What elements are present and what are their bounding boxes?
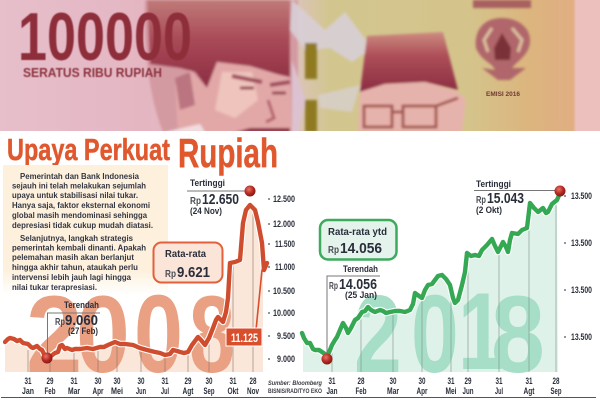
callout: Tertinggi 2008: (24 Nov) xyxy=(190,206,222,216)
callout: Terendah 2008: Rp xyxy=(55,317,65,328)
x axis 2008: Sep xyxy=(204,386,215,397)
callout: Terendah 2018 xyxy=(322,264,380,364)
y axis 2008: 10.500 xyxy=(273,286,295,296)
year watermark 2008: 0 xyxy=(76,272,130,395)
x axis 2008: 31 xyxy=(24,376,32,387)
area under 2018 line xyxy=(303,200,558,372)
banknote photo xyxy=(0,0,600,132)
callout: Terendah 2008: 9.060 xyxy=(65,313,98,329)
y axis 2008: 12.000 xyxy=(273,219,295,229)
x axis 2018: 30 xyxy=(418,376,426,387)
x axis 2008: 31 xyxy=(70,376,78,387)
year watermark 2018 xyxy=(354,269,545,395)
callout: Rata-rata 2008: 9.621 xyxy=(177,265,210,281)
callout: Rata-rata 2008 xyxy=(154,242,222,282)
x axis 2008: 30 xyxy=(138,376,144,387)
title: Upaya Perkuat xyxy=(7,132,170,167)
x axis 2018: 29 xyxy=(464,376,472,387)
callout: Tertinggi 2018: Tertinggi xyxy=(476,179,511,189)
body text: sejauh ini telah melakukan sejumlah xyxy=(12,180,146,190)
y axis 2018: 13.500 xyxy=(571,285,592,295)
body text: pelemahan masih akan berlanjut xyxy=(12,252,134,262)
callout: Tertinggi 2008: Tertinggi xyxy=(190,178,225,188)
callout: Rata-rata ytd 2018: Rp xyxy=(328,245,339,256)
x axis 2008: Okt xyxy=(228,386,239,397)
2018 line xyxy=(302,193,560,357)
body text: pemerintah kembali dinanti. Apakah xyxy=(12,242,146,252)
x axis 2008: 29 xyxy=(184,376,192,387)
callout: Tertinggi 2018 xyxy=(474,179,566,215)
x axis 2018: 31 xyxy=(448,376,455,387)
callout: Tertinggi 2018: Rp xyxy=(476,195,486,206)
callout: Tertinggi 2008 xyxy=(187,178,256,216)
callout: Terendah 2018: (25 Jan) xyxy=(345,290,377,300)
body text: Hanya saja, faktor eksternal ekonomi xyxy=(12,200,150,210)
year watermark 2008: 0 xyxy=(134,274,183,396)
body text: hingga akhir tahun, ataukah perlu xyxy=(12,262,138,272)
year watermark 2018: 2 xyxy=(354,273,402,395)
x axis 2018: Feb xyxy=(356,386,367,397)
x axis 2008: 28 xyxy=(250,376,256,387)
source credit: BISNIS/RADITYO EKO xyxy=(268,389,322,395)
body text: intervensi lebih jauh lagi hingga xyxy=(12,272,131,282)
x axis 2008: Jun xyxy=(136,386,146,397)
x axis 2018: Mar xyxy=(387,386,399,397)
y axis 2008: 9.500 xyxy=(277,331,295,341)
x axis 2008: Jul xyxy=(161,386,169,397)
chart: 2008 xyxy=(5,194,295,397)
y axis 2008: 11.500 xyxy=(275,239,295,249)
title: Rupiah xyxy=(178,130,278,176)
body text: upaya untuk stabilisasi nilai tukar. xyxy=(12,190,138,200)
x axis 2018: 30 xyxy=(390,376,396,387)
y axis 2018: 13.500 xyxy=(571,191,592,201)
y axis 2008: 11.000 xyxy=(275,262,295,272)
x axis 2008: Mei xyxy=(111,386,123,397)
x axis 2008: Mar xyxy=(68,386,80,397)
body text: Pemerintah dan Bank Indonesia xyxy=(20,171,139,181)
callout: 11.125 xyxy=(226,328,262,346)
2008 line xyxy=(5,205,267,358)
text panel background xyxy=(3,165,168,295)
body text xyxy=(12,171,153,292)
x axis 2018: Agt xyxy=(524,386,535,397)
callout: Tertinggi 2008: Rp xyxy=(190,196,201,207)
x axis 2008: 30 xyxy=(94,376,102,387)
x axis 2018: Jun xyxy=(462,386,474,397)
callout: 11.125: 11.125 xyxy=(231,333,258,345)
callout: Rata-rata 2008: Rp xyxy=(165,269,176,280)
y axis 2018 xyxy=(564,191,592,342)
x axis 2018: Sep xyxy=(550,386,562,397)
year watermark 2008: 8 xyxy=(189,272,235,396)
x axis 2008: 31 xyxy=(230,376,237,387)
source credit: Sumber: Bloomberg xyxy=(268,380,322,387)
callout: Terendah 2018: Rp xyxy=(329,281,338,292)
body text: global masih mendominasi sehingga xyxy=(12,210,147,220)
body text: Selanjutnya, langkah strategis xyxy=(20,233,133,243)
x axis 2008: Nov xyxy=(247,386,259,397)
callout: Terendah 2018: 14.056 xyxy=(339,277,377,293)
x axis 2008: Feb xyxy=(44,386,56,397)
area under 2008 line xyxy=(5,205,263,372)
callout: Terendah 2018: Terendah xyxy=(343,264,378,274)
banknote value: 100000 xyxy=(18,0,192,75)
y axis 2018: 13.500 xyxy=(571,238,592,248)
x axis 2008: Jan xyxy=(22,386,34,397)
x axis 2008: 29 xyxy=(46,376,54,387)
callout: Tertinggi 2008: 12.650 xyxy=(202,192,239,208)
callout: Terendah 2008: (27 Feb) xyxy=(68,326,98,336)
year watermark 2008: 2 xyxy=(26,273,82,396)
callout: Terendah 2008 xyxy=(42,300,100,364)
x axis 2008: 30 xyxy=(114,376,120,387)
callout: Rata-rata ytd 2018: Rata-rata ytd xyxy=(328,227,387,238)
y axis 2008: 9.000 xyxy=(277,354,295,364)
x axis 2008: 31 xyxy=(162,376,169,387)
callout: Tertinggi 2018: (2 Okt) xyxy=(476,205,502,215)
source credit xyxy=(268,380,322,395)
year watermark 2008 xyxy=(26,272,235,396)
page content xyxy=(3,130,592,397)
x axis 2018: 28 xyxy=(358,376,364,387)
banknote value in words: SERATUS RIBU RUPIAH xyxy=(23,65,162,80)
banknote year: EMISI 2016 xyxy=(486,92,521,98)
chart: 2018 xyxy=(302,191,592,397)
x axis 2018: 31 xyxy=(328,376,336,387)
x axis 2018: 28 xyxy=(552,376,560,387)
x axis 2008 xyxy=(22,376,259,397)
x axis 2008: 30 xyxy=(206,376,212,387)
x axis 2018: Mei xyxy=(446,386,456,397)
body text: nilai tukar terapresiasi. xyxy=(12,282,97,292)
x axis 2008: Agt xyxy=(182,386,194,397)
year watermark 2018: 1 xyxy=(458,269,504,393)
callout: Rata-rata ytd 2018 xyxy=(320,220,396,260)
y axis 2018: 13.500 xyxy=(571,332,592,342)
x axis 2018: 31 xyxy=(496,376,503,387)
year watermark 2018: 0 xyxy=(411,273,459,395)
callout: Rata-rata 2008: Rata-rata xyxy=(165,249,206,260)
body text: depresiasi tidak cukup mudah diatasi. xyxy=(12,220,153,230)
y axis 2008: 10.000 xyxy=(273,308,295,318)
x axis 2018: 31 xyxy=(526,376,533,387)
callout: Rata-rata ytd 2018: 14.056 xyxy=(340,241,382,257)
x axis 2008: Apr xyxy=(92,386,104,397)
x axis 2018: Jul xyxy=(495,386,503,397)
title xyxy=(7,130,278,176)
year watermark 2018: 8 xyxy=(491,272,545,395)
x axis 2018 xyxy=(326,376,562,397)
y axis 2008: 12.500 xyxy=(273,194,295,204)
callout: Tertinggi 2018: 15.043 xyxy=(487,191,524,207)
x axis 2018: Apr xyxy=(416,386,428,397)
x axis 2018: Jan xyxy=(326,386,338,397)
callout: Terendah 2008: Terendah xyxy=(64,300,99,310)
y axis 2008 xyxy=(268,194,295,364)
